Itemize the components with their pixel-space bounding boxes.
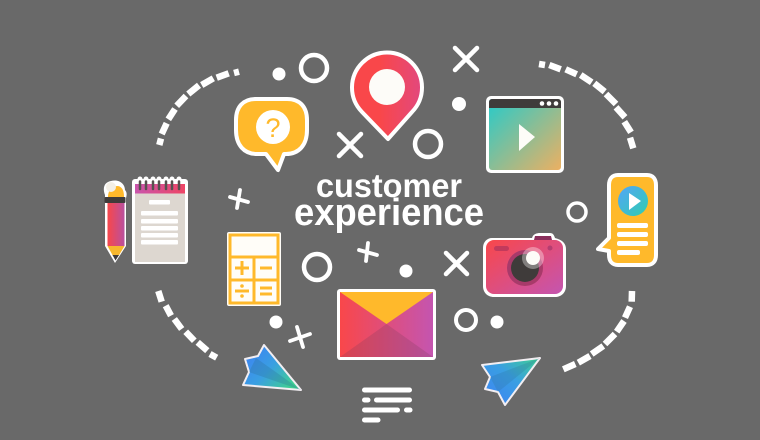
icon: camera	[483, 233, 566, 297]
icon: notepad	[132, 176, 188, 264]
icon: paper plane right	[482, 358, 540, 405]
icon: video window	[486, 96, 564, 173]
icon: pencil	[104, 180, 127, 263]
title: customer experience: experience	[294, 192, 484, 234]
icon: calculator	[227, 232, 281, 306]
title: customer experience: customer	[316, 167, 462, 204]
icon: location pin	[352, 53, 422, 139]
icon: video chat bubble	[598, 175, 656, 265]
icon: envelope	[337, 289, 436, 360]
icon: text lines	[362, 388, 412, 422]
icon: question speech bubble: ?	[265, 113, 281, 143]
dashed arc: bottom right	[563, 291, 632, 369]
dashed arc: top right	[539, 64, 633, 148]
dashed arc: top left	[159, 72, 239, 145]
icon: question speech bubble	[236, 99, 307, 170]
dashed arc: bottom left	[158, 291, 217, 358]
title: customer experience	[294, 167, 484, 234]
icon: paper plane left	[243, 345, 301, 390]
decorative dots, rings and crosses	[230, 48, 586, 347]
